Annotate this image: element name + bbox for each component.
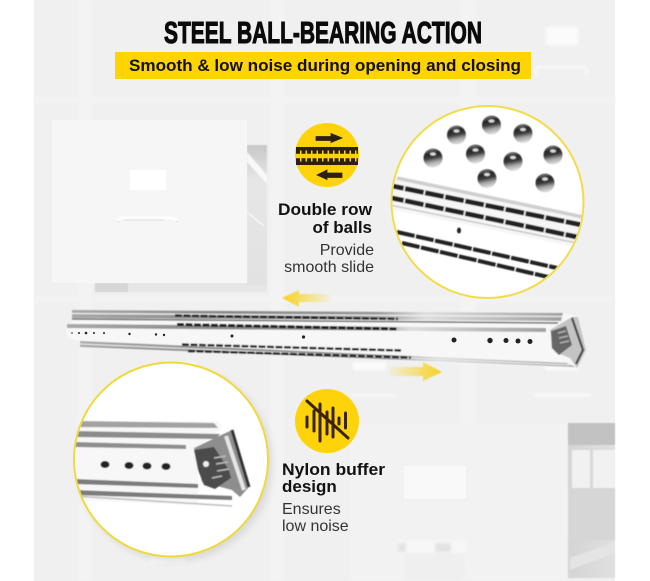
subtitle banner: Smooth & low noise during opening and closing — [129, 56, 521, 75]
arrow: slide left — [282, 290, 330, 307]
text: double row of balls: Provide — [320, 242, 374, 259]
rail end close-up — [70, 421, 249, 506]
top-left open drawer — [52, 120, 267, 292]
title: STEEL BALL-BEARING ACTION — [164, 15, 482, 50]
subtitle banner — [115, 52, 531, 79]
text: double row of balls — [278, 200, 374, 276]
bottom-right drawer with files — [398, 423, 615, 581]
icon: double row of balls — [295, 123, 359, 187]
text: nylon buffer design: low noise — [282, 518, 349, 535]
text: nylon buffer design — [282, 460, 385, 535]
text: double row of balls: Double row — [278, 200, 373, 219]
text: nylon buffer design: Ensures — [282, 501, 341, 518]
text: double row of balls: of balls — [312, 218, 372, 237]
mounting holes — [71, 332, 532, 344]
rail close-up — [385, 176, 590, 277]
circle callout: nylon buffer — [70, 362, 272, 560]
circle callout: steel balls — [385, 106, 590, 298]
text: nylon buffer design: Nylon buffer — [282, 460, 385, 479]
steel balls — [424, 116, 562, 192]
nylon buffer end cap — [550, 317, 586, 368]
arrow: slide right — [390, 362, 442, 381]
drawer slide rail — [66, 310, 586, 368]
icon: noise reduction — [295, 389, 359, 453]
text: nylon buffer design: design — [282, 477, 337, 496]
text: double row of balls: smooth slide — [284, 259, 374, 276]
